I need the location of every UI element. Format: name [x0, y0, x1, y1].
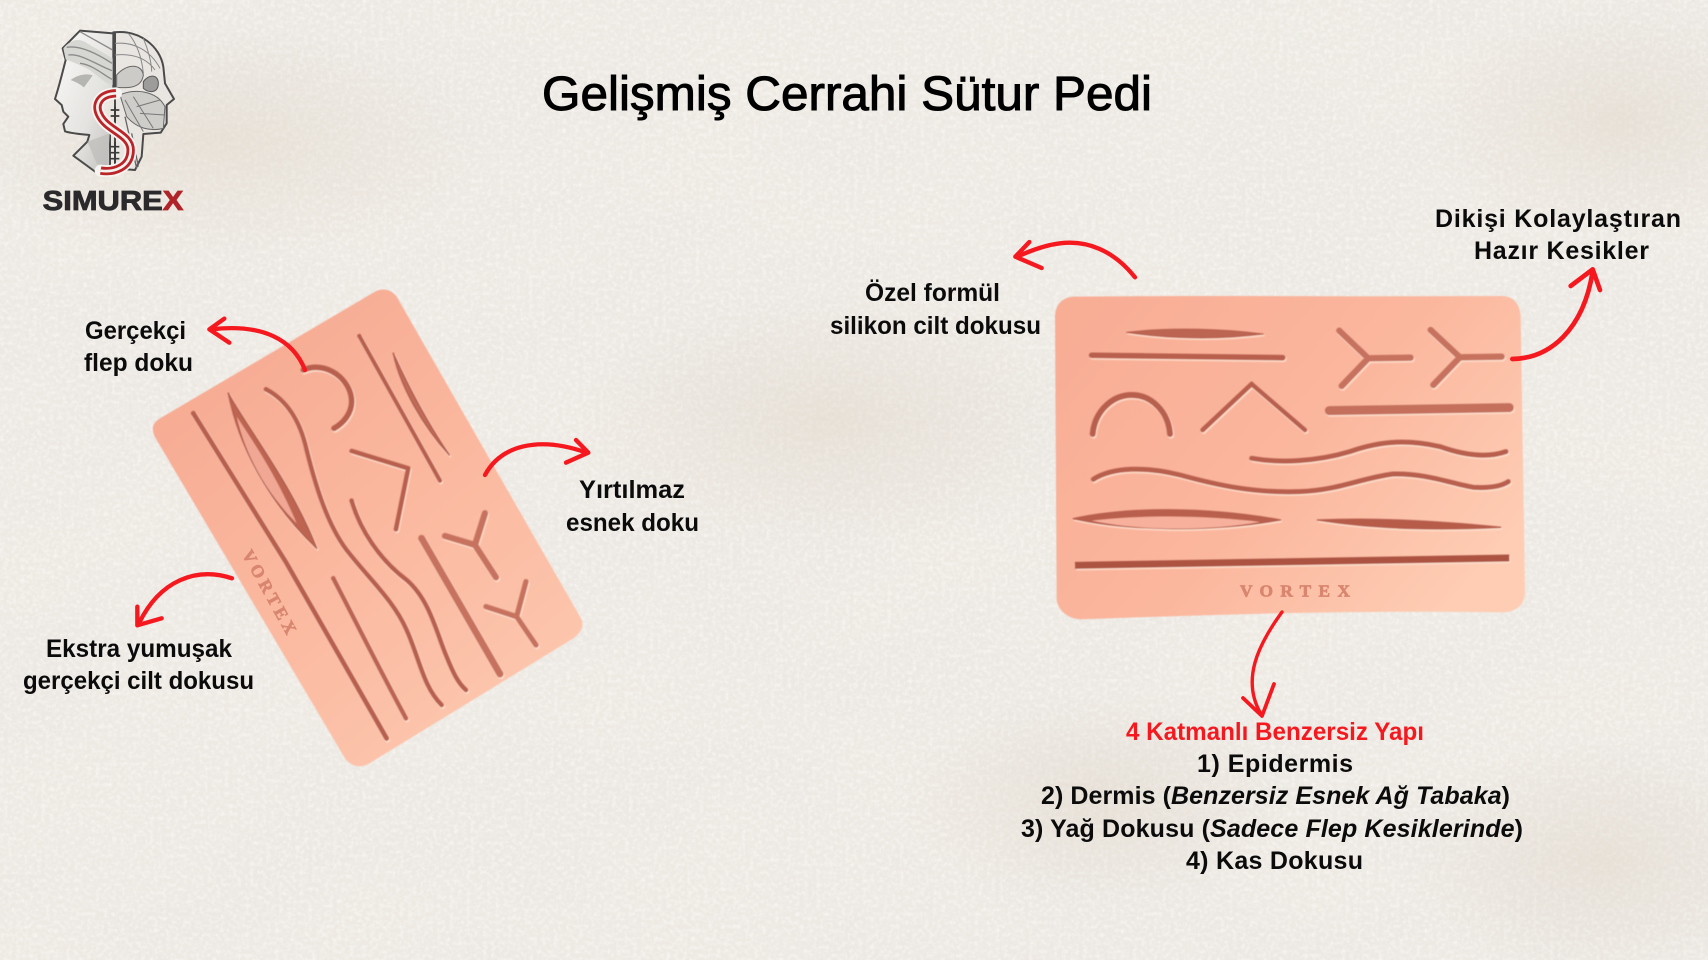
- arrow: extra soft: [137, 574, 232, 625]
- label: silicone skin: [830, 278, 1041, 340]
- layer 2: 2) Dermis (Benzersiz Esnek Ağ Tabaka): [1041, 782, 1510, 810]
- logo: Simurex head and wordmark: [43, 31, 184, 216]
- label: realistic flap tissue: flep doku: [84, 349, 193, 377]
- pad body: [153, 290, 582, 766]
- label: extra soft skin: gerçekçi cilt dokusu: [23, 667, 254, 695]
- incisions: [1073, 329, 1509, 565]
- brand emboss: VORTEX: [1240, 582, 1350, 601]
- layer 3: 3) Yağ Dokusu (Sadece Flep Kesiklerinde): [1021, 815, 1523, 843]
- pad body: [1055, 296, 1525, 619]
- layer 4: 4) Kas Dokusu: [1186, 847, 1363, 875]
- layer 1: 1) Epidermis: [1197, 750, 1353, 778]
- arrow: tear resistant: [485, 440, 588, 475]
- title: Gelişmiş Cerrahi Sütur Pedi: [542, 68, 1152, 121]
- label: tear resistant tissue: [566, 476, 699, 537]
- label: extra soft skin: [23, 635, 254, 695]
- panel: flat suture pad: [1055, 296, 1525, 619]
- text block: four layer structure: [1021, 718, 1523, 875]
- label: realistic flap tissue: Gerçekçi: [85, 317, 186, 345]
- icon: red S: [97, 93, 131, 171]
- label: tear resistant tissue: Yırtılmaz: [579, 476, 685, 504]
- arrow: four layers: [1243, 612, 1282, 716]
- label: ready incisions: Dikişi Kolaylaştıran: [1435, 205, 1681, 233]
- wordmark: SIMUREX: [43, 185, 184, 216]
- label: realistic flap tissue: [84, 317, 193, 377]
- incisions: [193, 336, 536, 738]
- red heading: 4 Katmanlı Benzersiz Yapı: [1126, 718, 1424, 746]
- label: silicone skin: Özel formül: [865, 278, 1000, 307]
- panel: rotated suture pad: [153, 290, 582, 766]
- label: silicone skin: silikon cilt dokusu: [830, 312, 1041, 340]
- arrow: realistic flap: [209, 319, 305, 370]
- arrow: ready incisions: [1512, 269, 1600, 359]
- icon: anatomical head half: [113, 32, 174, 170]
- icon: classical head half: [55, 31, 113, 174]
- label: ready incisions: Hazır Kesikler: [1474, 237, 1649, 265]
- label: extra soft skin: Ekstra yumuşak: [46, 635, 232, 663]
- label: ready incisions: [1435, 205, 1681, 265]
- arrow: silicone skin: [1015, 242, 1135, 277]
- brand emboss: VORTEX: [238, 547, 300, 638]
- label: tear resistant tissue: esnek doku: [566, 509, 699, 537]
